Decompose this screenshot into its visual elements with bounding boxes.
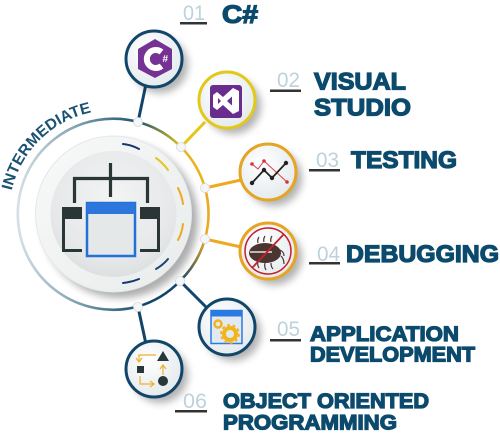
item 6: Object Oriented Programming: OBJECT ORIENTED	[223, 389, 429, 413]
item 5: Application Development: 05	[277, 318, 300, 341]
item 1: C#: C#	[222, 1, 258, 29]
item 2: Visual Studio: 02	[277, 69, 300, 92]
item 6: Object Oriented Programming: PROGRAMMING	[223, 410, 397, 434]
item 2: Visual Studio: VISUAL	[314, 68, 406, 96]
connector lines	[138, 84, 241, 344]
item 5: Application Development	[199, 299, 475, 366]
dashes on disc	[123, 144, 183, 283]
ring nodes	[134, 118, 210, 312]
item 6: Object Oriented Programming	[126, 341, 429, 434]
item 4: Debugging: DEBUGGING	[346, 241, 499, 268]
item 4: Debugging	[240, 223, 499, 285]
item 2: Visual Studio: STUDIO	[314, 94, 411, 122]
item 2: Visual Studio	[199, 68, 411, 134]
item 1: C#: 01	[183, 2, 205, 25]
item 1: C#: #	[162, 54, 168, 65]
item 5: Application Development: APPLICATION	[310, 322, 459, 346]
item 5: Application Development: DEVELOPMENT	[310, 342, 475, 366]
icon: hierarchy window	[62, 163, 160, 256]
item 4: Debugging: 04	[317, 243, 340, 266]
item 3: Testing: TESTING	[351, 147, 457, 174]
item 1: C#	[126, 1, 258, 93]
item 6: Object Oriented Programming: 06	[183, 390, 207, 413]
central disc	[36, 136, 198, 298]
outer ring	[18, 119, 208, 310]
arc label: INTERMEDIATE	[2, 102, 91, 190]
item 3: Testing	[240, 144, 457, 206]
item 3: Testing: 03	[316, 149, 339, 172]
